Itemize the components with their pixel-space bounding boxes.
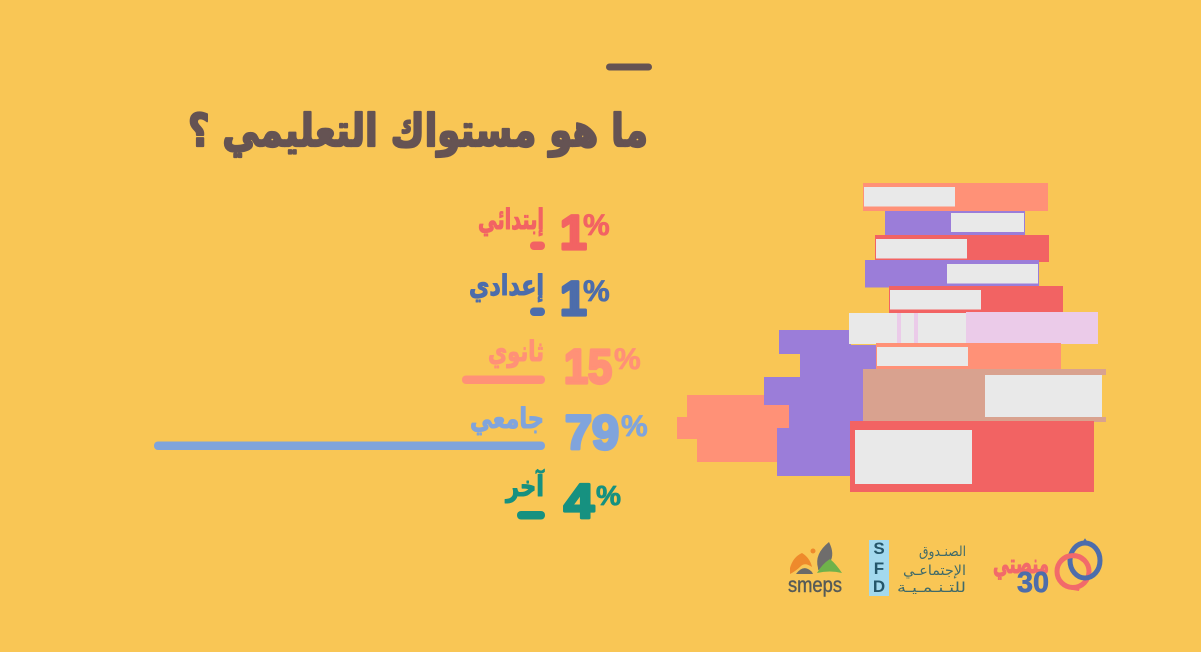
label: secondary: ثانوي xyxy=(488,335,544,368)
book 1: salmon xyxy=(863,183,1048,211)
row: university education 79% xyxy=(154,402,648,460)
SFD Arabic name: الإجتماعـي xyxy=(903,563,966,579)
book 9: red xyxy=(850,421,1094,492)
logo: SFD xyxy=(869,539,966,596)
SFD Arabic name xyxy=(897,544,966,596)
row: secondary education 15% xyxy=(462,335,641,394)
value: primary xyxy=(560,207,610,260)
label: other: آخر xyxy=(504,469,545,503)
logo mark: smeps leaves xyxy=(790,542,842,574)
value: secondary xyxy=(564,341,641,394)
value: preparatory: % xyxy=(583,275,610,308)
bar: university xyxy=(154,442,545,450)
value: other xyxy=(564,476,621,529)
logo: Minassati 30 xyxy=(993,540,1100,599)
illustration: stack of books and pile xyxy=(677,183,1106,492)
row: primary education 1% xyxy=(478,203,610,260)
book: salmon pile xyxy=(677,395,789,462)
value: other: 4 xyxy=(564,476,594,529)
value: primary: 1 xyxy=(560,207,587,260)
book 8: tan xyxy=(863,369,1106,422)
bar: preparatory xyxy=(530,308,545,316)
SFD letters: D xyxy=(873,577,885,596)
bar: primary xyxy=(530,242,545,250)
value: secondary: % xyxy=(614,343,641,376)
book 5: red xyxy=(889,286,1063,313)
value: primary: % xyxy=(583,209,610,242)
logo: smeps xyxy=(788,542,842,597)
book 7: salmon xyxy=(876,343,1061,370)
label: university: جامعي xyxy=(470,402,544,435)
SFD letters: F xyxy=(874,559,884,578)
logo text: smeps: smeps xyxy=(788,574,842,597)
value: preparatory xyxy=(560,273,610,326)
label: primary: إبتدائي xyxy=(478,203,544,237)
book 4: purple xyxy=(865,260,1039,288)
book: purple pile xyxy=(764,330,877,476)
book 2: purple xyxy=(885,211,1025,235)
bar: secondary xyxy=(462,376,545,384)
SFD Arabic name: للتـنـمـيـة xyxy=(897,580,966,596)
row: other 4% xyxy=(504,469,621,529)
value: preparatory: 1 xyxy=(560,273,587,326)
row: preparatory education 1% xyxy=(469,269,610,326)
logo text: minassati: منصتي xyxy=(993,549,1049,580)
title: ما هو مستواك التعليمي ؟ xyxy=(188,104,648,157)
value: other: % xyxy=(596,480,621,511)
logo mark: interlocking rings xyxy=(1057,540,1100,590)
label: preparatory: إعدادي xyxy=(469,269,544,303)
value: university: 79 xyxy=(565,407,619,460)
SFD letters xyxy=(873,539,885,596)
SFD blue panel xyxy=(869,540,889,596)
title accent bar xyxy=(606,64,652,70)
book 3: red xyxy=(875,235,1049,262)
bar: other xyxy=(517,511,545,520)
value: university xyxy=(565,407,648,460)
value: secondary: 15 xyxy=(564,341,612,394)
SFD Arabic name: الصنـدوق xyxy=(919,544,966,560)
value: university: % xyxy=(621,410,648,443)
SFD letters: S xyxy=(873,539,885,558)
book 6: pink xyxy=(849,312,1098,344)
logo text: 30: 30 xyxy=(1017,567,1049,599)
